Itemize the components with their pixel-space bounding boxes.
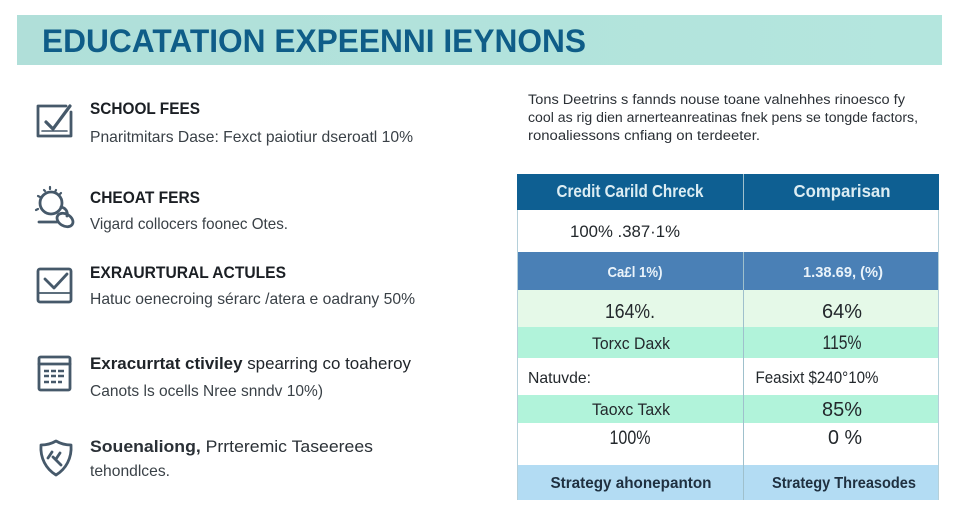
header row xyxy=(556,181,890,201)
row: zero values: 0 % xyxy=(828,427,862,449)
row: nature: Feasixt $240°10% xyxy=(756,368,878,387)
row: tax: 115% xyxy=(822,333,862,354)
item: extracurricular spending: Canots ls ocells Nree snndv 10%) xyxy=(90,383,323,400)
row: nature: Natuvde: xyxy=(528,370,591,387)
item: extracurricular activities xyxy=(38,263,415,308)
intro paragraph: Tons Deetrins s fannds nouse toane valnehhes rinoesco fy xyxy=(528,92,905,107)
item: school fees: Pnaritmitars Dase: Fexct paiotiur dseroatl 10% xyxy=(90,129,413,146)
item: cheoat fers xyxy=(36,187,288,233)
intro paragraph xyxy=(528,92,918,143)
row: zero values xyxy=(610,427,862,449)
row: tax two: Taoxc Taxk xyxy=(592,400,670,419)
icon: shield xyxy=(41,441,71,475)
row: percentages: 64% xyxy=(822,301,862,323)
panel: expense list xyxy=(36,99,415,480)
header row: Credit Carild Chreck xyxy=(556,181,704,201)
row: tax: Torxc Daxk xyxy=(592,334,670,353)
row: values: 100% .387·1% xyxy=(570,222,680,241)
row: nature xyxy=(528,368,878,387)
icon: check envelope xyxy=(38,269,71,302)
item: extracurricular spending: Exracurrtat ctiviley spearring co toaheroy xyxy=(90,355,412,373)
row: tax two xyxy=(592,399,862,421)
item: strategies: tehondlces. xyxy=(90,463,170,480)
row: strategy footer: Strategy ahonepanton xyxy=(550,475,712,492)
row: tax two: 85% xyxy=(822,399,862,421)
item: school fees xyxy=(38,99,413,146)
row: subheader: Ca£l 1%) xyxy=(608,264,663,281)
icon: calendar xyxy=(39,357,70,390)
icon: magnifier cluster xyxy=(36,187,75,229)
item: school fees: SCHOOL FEES xyxy=(90,99,200,118)
row: zero values: 100% xyxy=(610,428,651,449)
icon: checkbox xyxy=(38,106,71,136)
title banner xyxy=(17,15,942,65)
header row: Comparisan xyxy=(794,181,890,201)
intro paragraph: ronoaliessons cnfiang on terdeeter. xyxy=(528,128,760,143)
row: tax xyxy=(592,333,862,354)
item: extracurricular spending xyxy=(39,355,412,400)
item: strategies: Souenaliong, Prrteremic Taseerees xyxy=(90,438,373,456)
item: cheoat fers: Vigard collocers foonec Otes. xyxy=(90,216,288,233)
table row backgrounds xyxy=(517,174,939,500)
comparison table xyxy=(517,174,939,500)
row: strategy footer: Strategy Threasodes xyxy=(772,475,916,492)
row: strategy footer xyxy=(550,475,916,492)
item: extracurricular activities: EXRAURTURAL ACTULES xyxy=(90,263,286,282)
title: EDUCATATION EXPEENNI IEYNONS xyxy=(42,23,586,59)
intro paragraph: cool as rig dien arnerteanreatinas fnek pens se tongde factors, xyxy=(528,110,918,125)
item: extracurricular activities: Hatuc oenecroing sérarc /atera e oadrany 50% xyxy=(90,291,415,308)
row: percentages xyxy=(605,301,862,323)
row: subheader xyxy=(608,264,883,281)
row: subheader: 1.38.69, (%) xyxy=(803,264,883,281)
item: cheoat fers: CHEOAT FERS xyxy=(90,188,200,207)
row: percentages: 164%. xyxy=(605,301,655,323)
item: strategies xyxy=(41,438,373,480)
